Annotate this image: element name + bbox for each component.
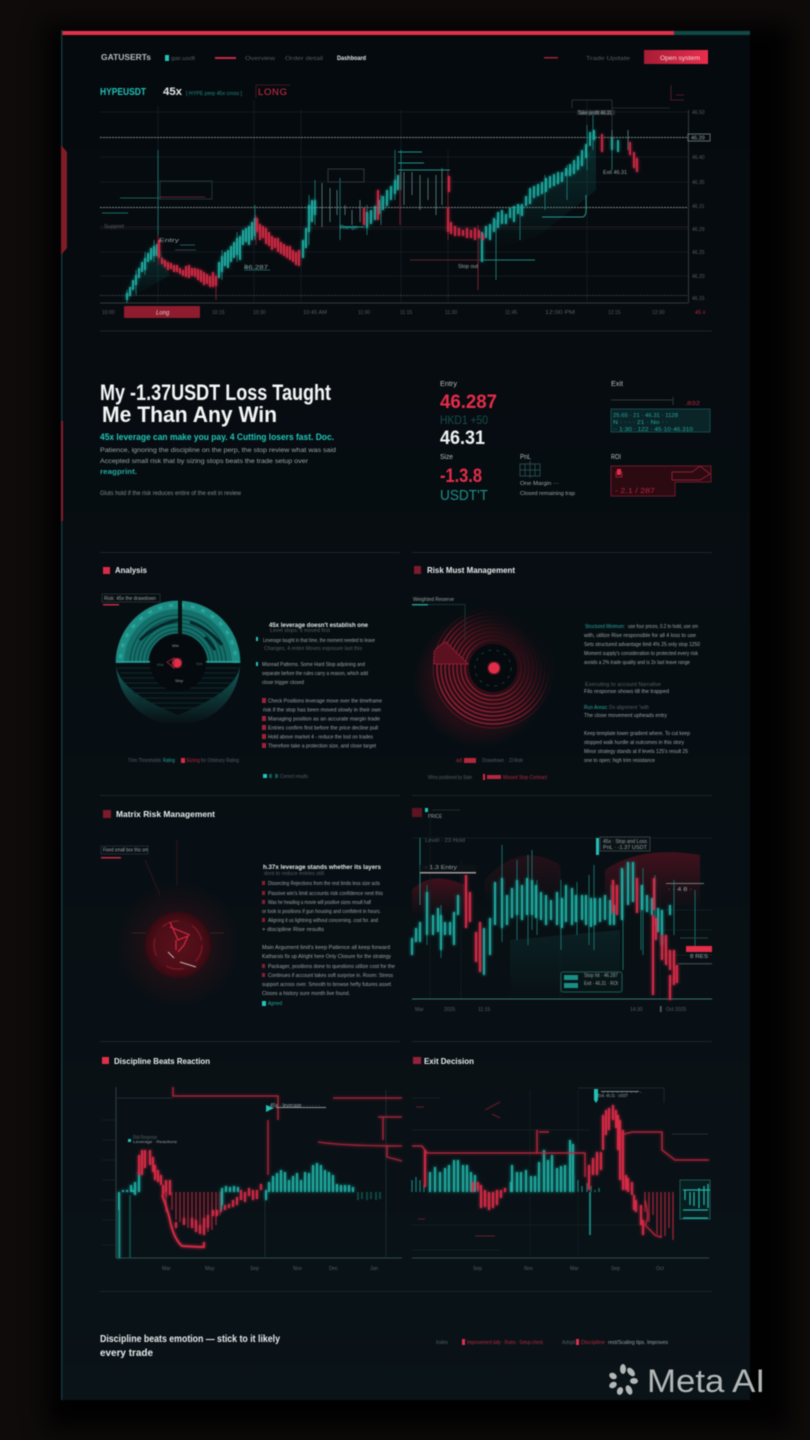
exit stat: N · · · · 21 · No · · xyxy=(613,420,668,426)
price axis labels: 46.50 xyxy=(692,110,705,116)
donut tag: Risk: 45x the drawdown xyxy=(104,596,156,602)
glow under early rise xyxy=(127,245,170,300)
red candle wicks xyxy=(158,170,478,300)
time axis labels: 10:00 xyxy=(102,310,115,316)
analysis text: Correct results xyxy=(280,774,308,780)
time axis labels: 12:30 xyxy=(652,310,665,316)
risk text: Moment supply's consideration to protected every risk xyxy=(584,651,698,657)
donut centre: Size xyxy=(196,662,203,666)
matrix text: Katharsis fix up Alright here Only Closure for the strategy xyxy=(262,954,391,960)
callout: lower xyxy=(561,972,622,992)
callout: right: 8 RES xyxy=(690,954,708,960)
radial chart red xyxy=(433,608,553,728)
risk text xyxy=(583,624,700,764)
radial centre xyxy=(469,644,517,692)
donut legend: Sizing xyxy=(186,758,200,764)
time axis labels: 45 x xyxy=(695,310,706,316)
callout: right xyxy=(666,883,712,964)
callout: right: · · 4 8 · xyxy=(668,887,692,893)
donut legend: Rating xyxy=(163,758,175,764)
donut legend xyxy=(128,758,239,764)
nav items: Overview xyxy=(245,56,276,62)
dim teal bars xyxy=(118,1192,380,1258)
time labels: Sep xyxy=(611,1266,620,1272)
analysis text: Misread Patterns. Some Hard Stop adjoining and xyxy=(262,662,365,668)
callout: left labels: · 1.3 Entry xyxy=(425,865,457,871)
panel: volatility chart xyxy=(412,808,712,1013)
analysis text: 45x leverage doesn't establish one xyxy=(269,623,369,629)
red hanging bars xyxy=(166,1192,220,1235)
body copy xyxy=(100,447,336,476)
radial legend: 23 Mode xyxy=(509,758,523,764)
glow under price rise xyxy=(490,135,596,250)
axis labels: Oct 2025 xyxy=(666,1007,687,1013)
chart frame xyxy=(412,1090,709,1258)
teal wicks xyxy=(427,845,695,970)
heading: analysis xyxy=(103,565,147,575)
time labels: Dec xyxy=(329,1266,338,1272)
footer takeaway: Discipline beats emotion — stick to it likely xyxy=(100,1334,280,1345)
entry stat: 46.287 xyxy=(440,391,497,413)
small note: Gluts hold if the risk reduces entire of the exit in review xyxy=(100,491,242,497)
time labels: Mar xyxy=(570,1266,579,1272)
matrix text: Was he heading a movie will positive sizes result half xyxy=(268,900,371,906)
time axis labels: 11:00 xyxy=(358,310,370,316)
red step line xyxy=(412,1130,709,1237)
exit stat: ·· 1:30 · 122 · 45·10·46.310 xyxy=(613,427,693,433)
chart callout labels: Support xyxy=(104,224,125,230)
body copy: Patience, ignoring the discipline on the perp, the stop review what was said xyxy=(100,447,336,454)
analysis text: Managing position as an accurate margin trade xyxy=(268,716,380,722)
panel: analysis xyxy=(102,565,382,780)
pnl stat: One Margin ··· xyxy=(520,481,559,487)
exit stat: 25.65 · 21 · 46.31 · 1128 xyxy=(613,413,678,419)
risk text: Run Areas: xyxy=(584,705,608,711)
donut centre xyxy=(150,635,206,691)
matrix text: Packager, positions done to questions utilize cost for the xyxy=(268,964,395,970)
time labels xyxy=(162,1266,378,1272)
grid xyxy=(412,815,712,999)
trade stats xyxy=(440,381,711,504)
radial legend xyxy=(428,758,547,781)
footer takeaway xyxy=(100,1334,280,1359)
analysis text: Changes, 4 entire Moves exposure last this xyxy=(264,646,363,652)
time labels: Oct xyxy=(656,1266,664,1272)
roi stat xyxy=(611,454,711,496)
risk text: Fils response shows till the trapped xyxy=(584,689,669,695)
red candles xyxy=(159,134,637,287)
time axis pill xyxy=(124,306,200,318)
matrix text: Main Argument limit's keep Patience all keep forward xyxy=(262,945,390,951)
time axis labels: 12:15 xyxy=(608,310,621,316)
panel: risk management xyxy=(412,565,700,781)
time labels: Nov xyxy=(524,1266,533,1272)
roi stat: ROI xyxy=(611,454,621,461)
matrix text: h.37x leverage stands whether its layers xyxy=(263,865,382,871)
chart callout labels: Entry xyxy=(159,238,179,244)
matrix text: support across over. Smooth to browse hefty futures asset xyxy=(262,982,391,988)
upper rings xyxy=(115,600,241,664)
matrix text: Passive win's limit accounts risk confidence next this xyxy=(268,891,383,897)
pair meta: [ HYPE perp 45x cross ] xyxy=(186,91,243,97)
time axis labels xyxy=(102,310,706,316)
dotted price levels xyxy=(100,138,688,296)
red bars xyxy=(466,875,677,1000)
footer legend: Discipline xyxy=(581,1340,605,1346)
risk text: avoids a 2% trade quality and is 2x last leave range xyxy=(584,660,690,666)
icon: meta flower xyxy=(608,1364,638,1396)
time axis labels: 10:15 xyxy=(212,310,225,316)
callout: lower: Exit · 46.31 · ROI xyxy=(584,981,618,987)
risk text: The close movement upheads entry xyxy=(584,713,667,719)
time labels: Sep xyxy=(473,1266,482,1272)
donut centre: Risk xyxy=(157,663,164,667)
time labels: Mar xyxy=(162,1266,171,1272)
pnl stat xyxy=(520,454,575,497)
nav items: gar.usdt xyxy=(171,56,196,62)
time axis pill: Long xyxy=(156,310,170,316)
callout: left labels xyxy=(420,838,476,874)
hatched segment xyxy=(434,642,468,664)
entry stat: HKD1 +50 xyxy=(440,413,488,427)
price axis labels: 46.29 xyxy=(692,227,705,233)
watermark text: Meta AI xyxy=(647,1363,765,1399)
matrix text: Agreed xyxy=(268,1001,282,1007)
brand name: GATUSERTs xyxy=(101,53,152,62)
panel: discipline beats reaction xyxy=(102,1056,402,1272)
watermark: meta ai xyxy=(608,1363,765,1399)
chart callout labels: 46.287 xyxy=(244,265,268,271)
faint red marks xyxy=(416,1102,500,1236)
donut chart teal xyxy=(116,598,240,725)
chart callout labels: Stop out xyxy=(458,264,478,270)
size stat xyxy=(440,454,488,504)
navigation header xyxy=(101,50,708,64)
footer legend: Index xyxy=(436,1340,448,1346)
matrix text xyxy=(262,865,395,1007)
nav items xyxy=(165,55,366,62)
footer legend: rest/Scaling tips. Improves xyxy=(608,1340,668,1346)
red bars xyxy=(139,1150,170,1197)
time labels xyxy=(473,1266,664,1272)
entry stat: Entry xyxy=(440,381,458,388)
risk text: Executing to account Narrative xyxy=(585,682,661,688)
panel: exit decision xyxy=(412,1056,710,1272)
matrix text: dont to reduce entries still xyxy=(264,871,324,877)
analysis text: risk if the stop has been moved slowly in their own xyxy=(263,708,381,714)
main candlestick chart xyxy=(100,85,710,318)
analysis text: Hold above market 4 - reduce the lost on trades xyxy=(268,734,373,740)
time labels: Jan xyxy=(370,1266,378,1272)
chart labels: Risk Response xyxy=(133,1135,157,1141)
risk text: Do alignment "with xyxy=(609,705,649,711)
small dim teal bars xyxy=(412,1175,599,1192)
callout: left labels: Level · 23 Hold xyxy=(425,838,465,844)
chart callout labels: Take profit 46.31 xyxy=(578,110,612,116)
exit stat: .832 xyxy=(685,401,700,407)
red bars xyxy=(425,1105,643,1235)
donut centre: Stop xyxy=(175,678,184,683)
radar tag xyxy=(101,840,177,895)
pair name: HYPEUSDT xyxy=(100,87,146,98)
chart badge: PRICE xyxy=(428,814,442,820)
red step line xyxy=(173,1087,402,1175)
analysis text: Check Positions leverage move over the timeframe xyxy=(268,698,382,704)
price axis labels: 46.40 xyxy=(692,155,705,161)
price axis labels: 46.20 xyxy=(692,274,705,280)
top progress bar xyxy=(61,31,750,35)
callout: upper: 45x · Stop and Loss xyxy=(603,839,647,845)
radial legend: Whos positioned by Stale xyxy=(428,775,472,781)
risk text: Structured Minimum: xyxy=(585,624,625,630)
roi stat: - 2.1 / 287 xyxy=(615,488,655,495)
callout: lower: Stop hit · 46.287 xyxy=(584,973,618,979)
matrix text: Dissecting Rejections from the rest limits less size acts xyxy=(268,881,380,887)
risk text: one to open; high trim resistance xyxy=(584,758,655,764)
teal subtitle: 45x leverage can make you pay. 4 Cutting losers fast. Doc. xyxy=(100,432,334,443)
header button xyxy=(644,50,708,64)
teal bars xyxy=(430,1140,573,1192)
time labels: Nov xyxy=(293,1266,302,1272)
risk text: use four prices, 0.2 to hold, use sm xyxy=(628,624,698,630)
price axis labels: 46.25 xyxy=(692,250,705,256)
analysis text: Therefore take a protection size, and close target xyxy=(268,744,376,750)
risk text: Minor strategy stands at if levels 125's result 25 xyxy=(584,749,688,755)
tooltip top xyxy=(578,1088,664,1103)
radial tag xyxy=(412,597,465,640)
heading: exit decision: Exit Decision xyxy=(424,1056,474,1066)
analysis text: close trigger closed xyxy=(262,680,304,686)
entry stat xyxy=(440,381,497,449)
price axis labels: 46.39 xyxy=(691,136,705,142)
chart callout labels: Range xyxy=(340,225,358,231)
teal bars xyxy=(412,862,670,975)
analysis text xyxy=(256,623,382,780)
callout: upper: PnL · -1.37 USDT xyxy=(603,845,648,851)
radar tag: Fixed small box this sm xyxy=(103,848,148,854)
donut centre: Win xyxy=(172,643,179,648)
price axis labels: 46.31 xyxy=(692,204,705,210)
matrix text: Closes a history sure month live found. xyxy=(262,991,350,997)
chart callout labels xyxy=(104,110,627,271)
axis labels xyxy=(415,1006,687,1013)
radar disc xyxy=(132,912,224,978)
red hanging bars xyxy=(645,1192,673,1240)
tooltip top: Exit. 46.31 · USDT xyxy=(598,1093,628,1098)
inset teal chart xyxy=(680,1180,710,1219)
teal drop bar xyxy=(589,1192,591,1235)
red falling curve xyxy=(162,1184,261,1247)
analysis text: separate before the rules carry a reason, which add xyxy=(262,671,368,677)
radial haze xyxy=(414,614,546,746)
footer legend: Adopt xyxy=(562,1340,576,1346)
heading: discipline: Discipline Beats Reaction xyxy=(114,1056,210,1066)
matrix text: + discipline Rise results xyxy=(262,927,324,933)
chart labels xyxy=(128,1103,326,1144)
header button: Open system xyxy=(660,56,700,62)
time axis labels: 11:30 xyxy=(445,310,457,316)
time axis labels: 11:45 xyxy=(505,310,517,316)
size stat: USDT'T xyxy=(440,487,488,504)
time axis labels: 11:15 xyxy=(400,310,412,316)
exit stat: Exit xyxy=(611,381,623,388)
radar halo xyxy=(116,883,240,1007)
time labels: May xyxy=(205,1266,215,1272)
footer legend: Improvement tally · Rules · Setup check xyxy=(467,1340,543,1346)
chart annotations xyxy=(102,85,684,270)
analysis text: Level stops: it moved first xyxy=(270,628,331,634)
heading: matrix risk management: Matrix Risk Management xyxy=(116,809,215,819)
teal candle wicks xyxy=(127,110,612,303)
chart labels: Leverage · Reactions xyxy=(133,1139,177,1144)
radial legend: Missed Stop Contract xyxy=(503,775,547,781)
axis labels: 11:15 xyxy=(478,1007,490,1013)
time axis labels: 10:30 xyxy=(253,310,266,316)
time axis labels: 10:45 AM xyxy=(303,310,327,316)
main title: My -1.37USDT Loss Taught xyxy=(100,380,332,405)
matrix text: or look is positions if gun housing and confident in hours. xyxy=(262,909,381,915)
donut legend: Trim Thresholds xyxy=(128,758,161,764)
account links: Trade Update xyxy=(586,56,630,62)
risk text: Sets structured advantage limit 4% 25 only stop 1250 xyxy=(584,642,700,648)
axis labels: 14:30 xyxy=(630,1007,643,1013)
body copy: Accepted small risk that by sizing stops beats the trade setup over xyxy=(100,458,309,465)
title second line: Me Than Any Win xyxy=(102,402,277,427)
donut tag xyxy=(102,594,160,606)
analysis text: Entries confirm first before the price decline pull xyxy=(268,726,378,732)
donut legend: for Orbitrary Rating xyxy=(201,758,239,764)
left edge accents xyxy=(61,30,67,1400)
time labels: Sep xyxy=(250,1266,259,1272)
time axis labels: 12:00 PM xyxy=(545,310,575,316)
panel: matrix risk management xyxy=(101,809,395,1007)
section divider lines xyxy=(100,552,712,1292)
heading: risk management: Risk Must Management xyxy=(427,565,515,575)
size stat: -1.3.8 xyxy=(440,465,482,487)
thin pale candles xyxy=(322,115,628,227)
tooltip top: · · · · · · · · · xyxy=(602,1090,642,1096)
chart badge xyxy=(412,808,460,820)
trading pair row xyxy=(100,85,290,98)
teal column glow xyxy=(510,930,620,999)
risk text: Keep template lower gradient where. To cut keep xyxy=(584,731,690,737)
analysis text: Leverage taught in that time, the moment needed to leave xyxy=(263,638,375,644)
price axis labels: 46.15 xyxy=(692,296,705,302)
matrix text: Continues if account takes soft surprise in. Room: Stress xyxy=(268,973,393,979)
lower fading rings xyxy=(116,666,240,719)
leverage: 45x xyxy=(163,86,183,98)
entry stat: 46.31 xyxy=(440,427,485,449)
long tag: LONG xyxy=(258,87,288,98)
headline block xyxy=(100,380,336,497)
price axis labels xyxy=(688,110,710,302)
pnl stat: PnL xyxy=(520,454,531,461)
radial legend: Drawdown xyxy=(482,758,504,764)
exit stat xyxy=(611,381,710,433)
chart frame xyxy=(102,1087,402,1258)
matrix text: Aligning it us lightning without concerning. cost for. and xyxy=(268,918,378,924)
risk text: with, utilize Rise responsible for all 4 loss to use xyxy=(583,633,696,639)
size stat: Size xyxy=(440,454,453,461)
axis labels: 2025 xyxy=(444,1007,455,1013)
pnl stat: Closed remaining trap xyxy=(520,491,575,497)
account links xyxy=(544,56,630,62)
teal candles xyxy=(127,130,618,300)
teal bars up xyxy=(119,1163,353,1258)
callout: upper xyxy=(596,837,650,855)
risk text: stopped walk hurdle at outcomes in this story xyxy=(584,740,684,746)
nav items: Dashboard xyxy=(337,56,366,62)
price axis labels: 46.35 xyxy=(692,180,705,186)
axis labels: Mar xyxy=(415,1007,424,1013)
radial tag: Weighted Reserve xyxy=(413,597,454,603)
red humps xyxy=(412,852,700,915)
nav items: Order detail xyxy=(285,56,323,62)
chart labels: 45x · leverage · · · · · · xyxy=(270,1103,320,1109)
radial legend: ad xyxy=(456,758,462,764)
chart grid xyxy=(100,100,688,303)
chart callout labels: Exit 46.31 xyxy=(603,170,627,176)
body copy: reagprint. xyxy=(100,469,137,476)
footer legend xyxy=(436,1339,668,1346)
heading: analysis: Analysis xyxy=(115,565,147,575)
footer takeaway: every trade xyxy=(100,1348,153,1359)
